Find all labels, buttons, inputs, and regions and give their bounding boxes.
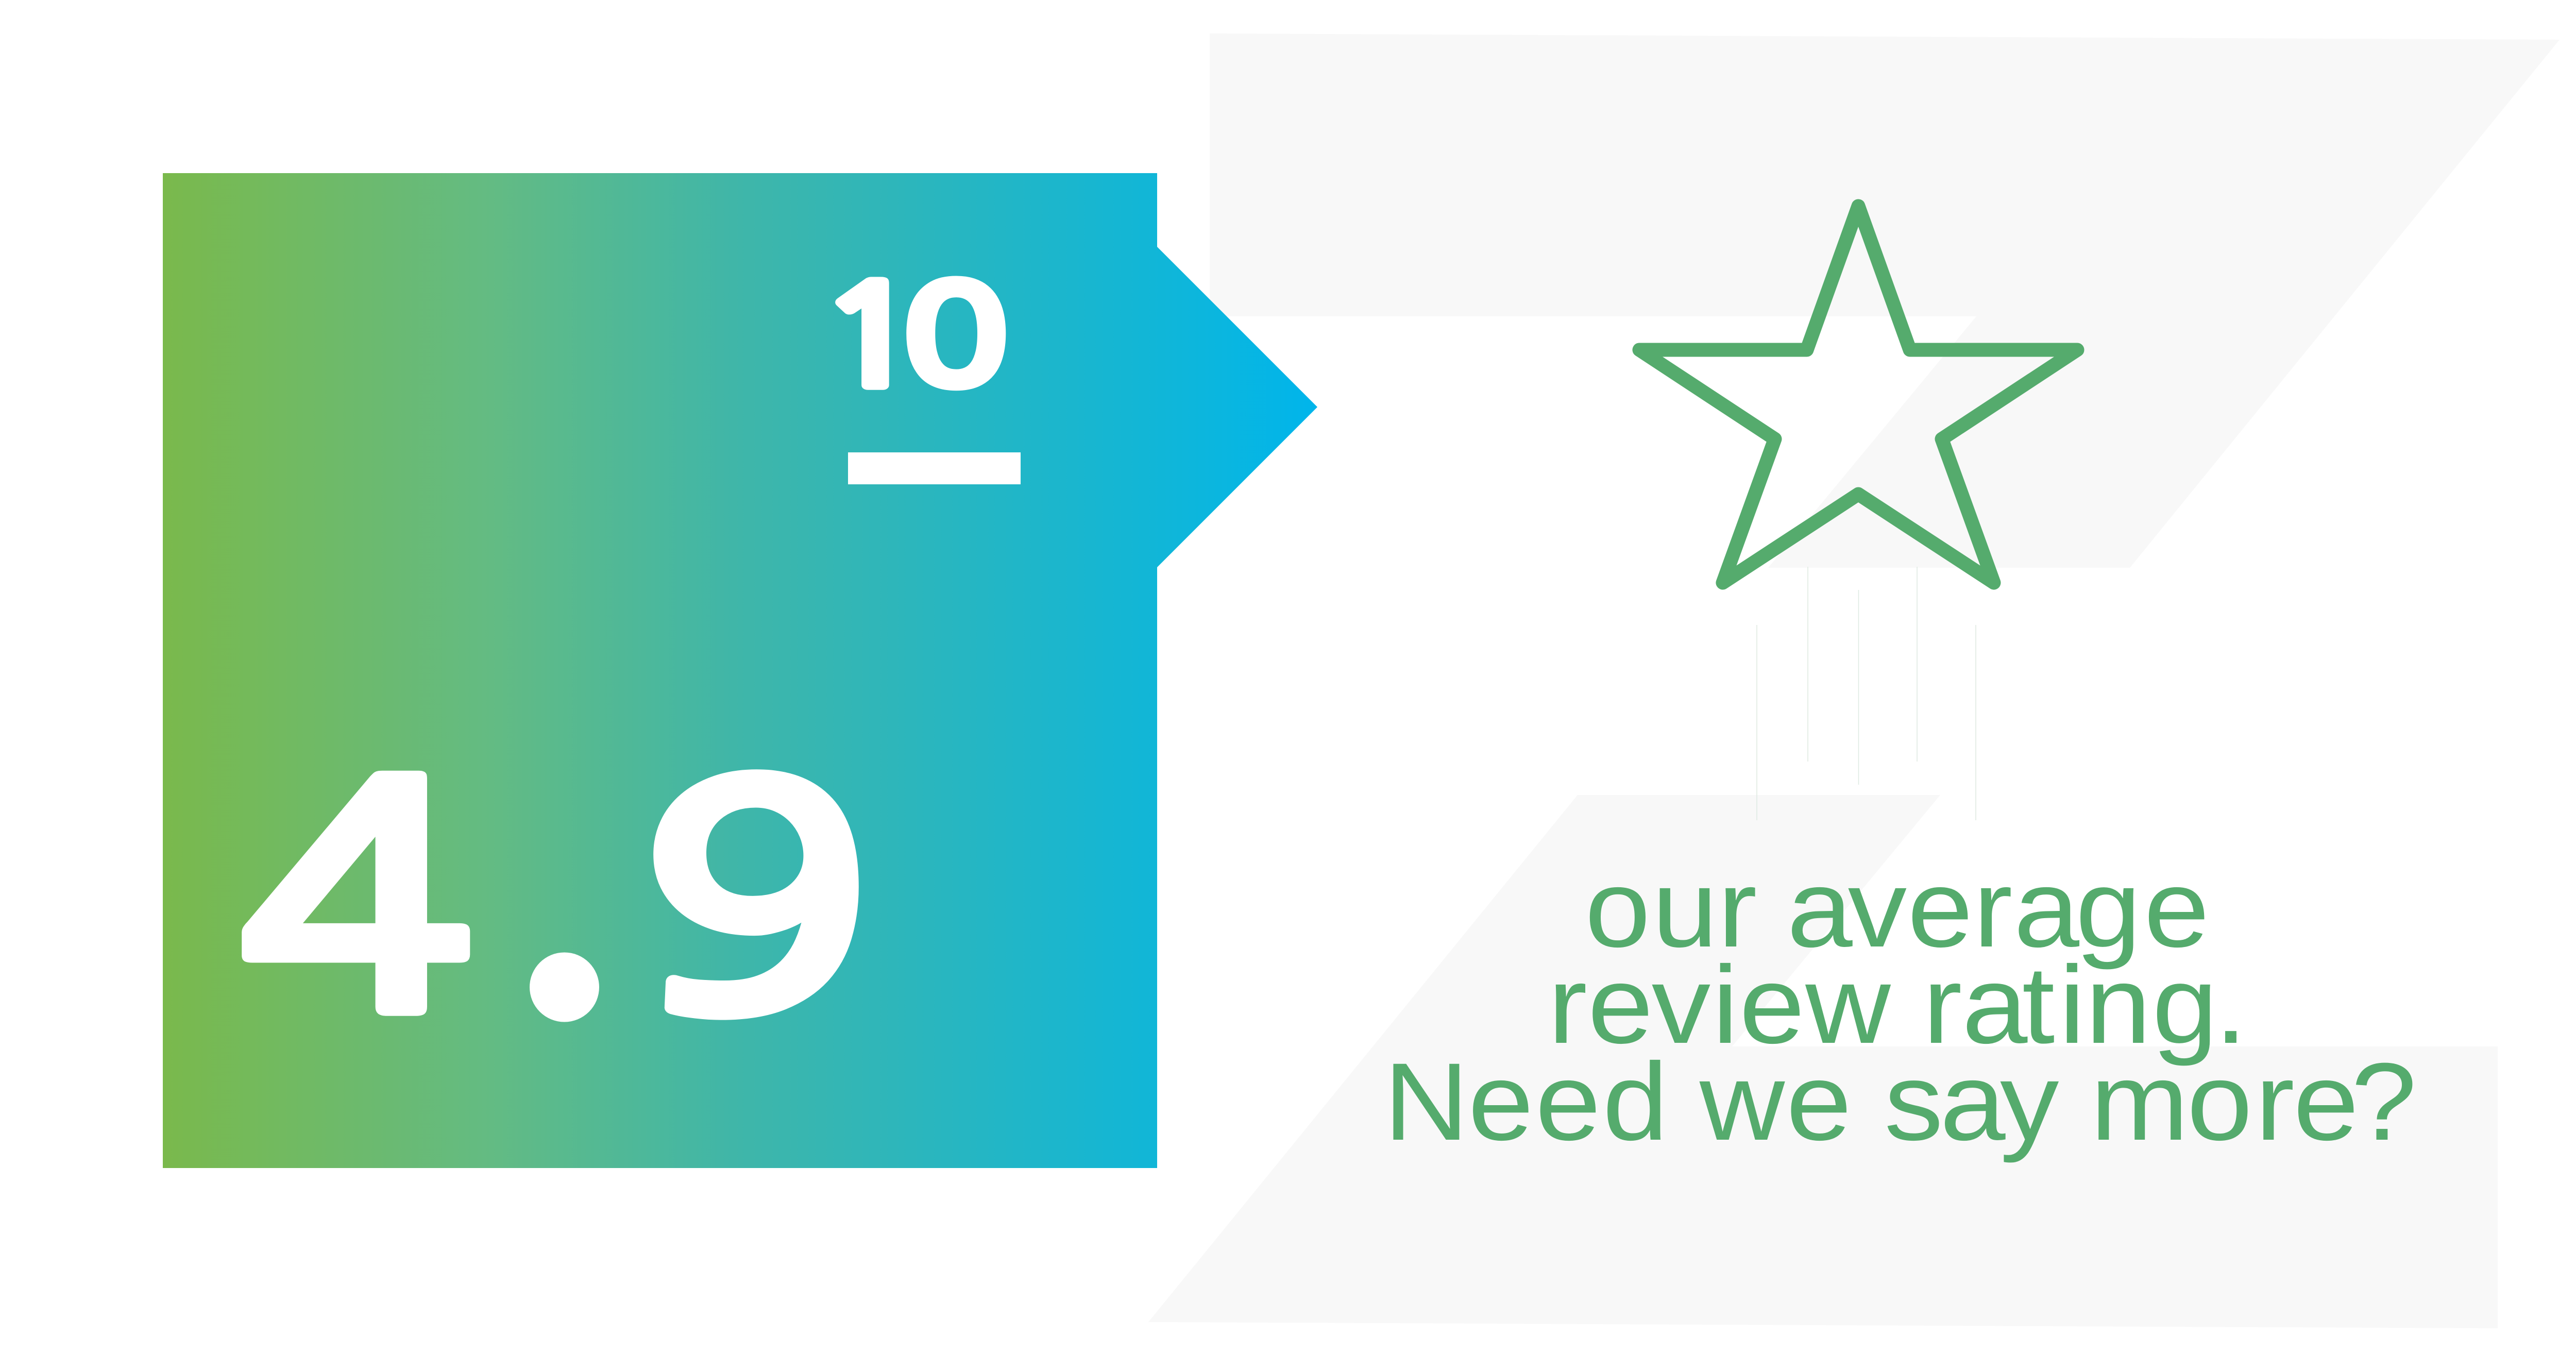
caption line 1: our average — [1585, 847, 2210, 970]
decimal point dot — [530, 952, 599, 1022]
caption line 2: review rating. — [1548, 943, 2247, 1066]
text block: review rating caption — [1384, 847, 2417, 1163]
background shape: upper grey parallelogram — [1210, 33, 2560, 568]
fraction bar — [848, 452, 1021, 484]
background shape: lower grey parallelogram — [1148, 795, 2498, 1328]
score numerator: 4.9: 9 — [635, 750, 876, 1060]
score numerator: 4.9: . — [523, 829, 603, 1033]
score denominator: 10: 10 — [816, 269, 1011, 408]
gradient box with right-pointing arrow — [163, 173, 1317, 1168]
score numerator: 4.9: 4 — [235, 748, 477, 1058]
faint vertical guide lines — [1757, 567, 1976, 820]
caption line 3: Need we say more? — [1384, 1040, 2417, 1163]
icon: outlined star — [1639, 206, 2077, 583]
panel: gradient score callout with arrow — [163, 173, 1317, 1168]
